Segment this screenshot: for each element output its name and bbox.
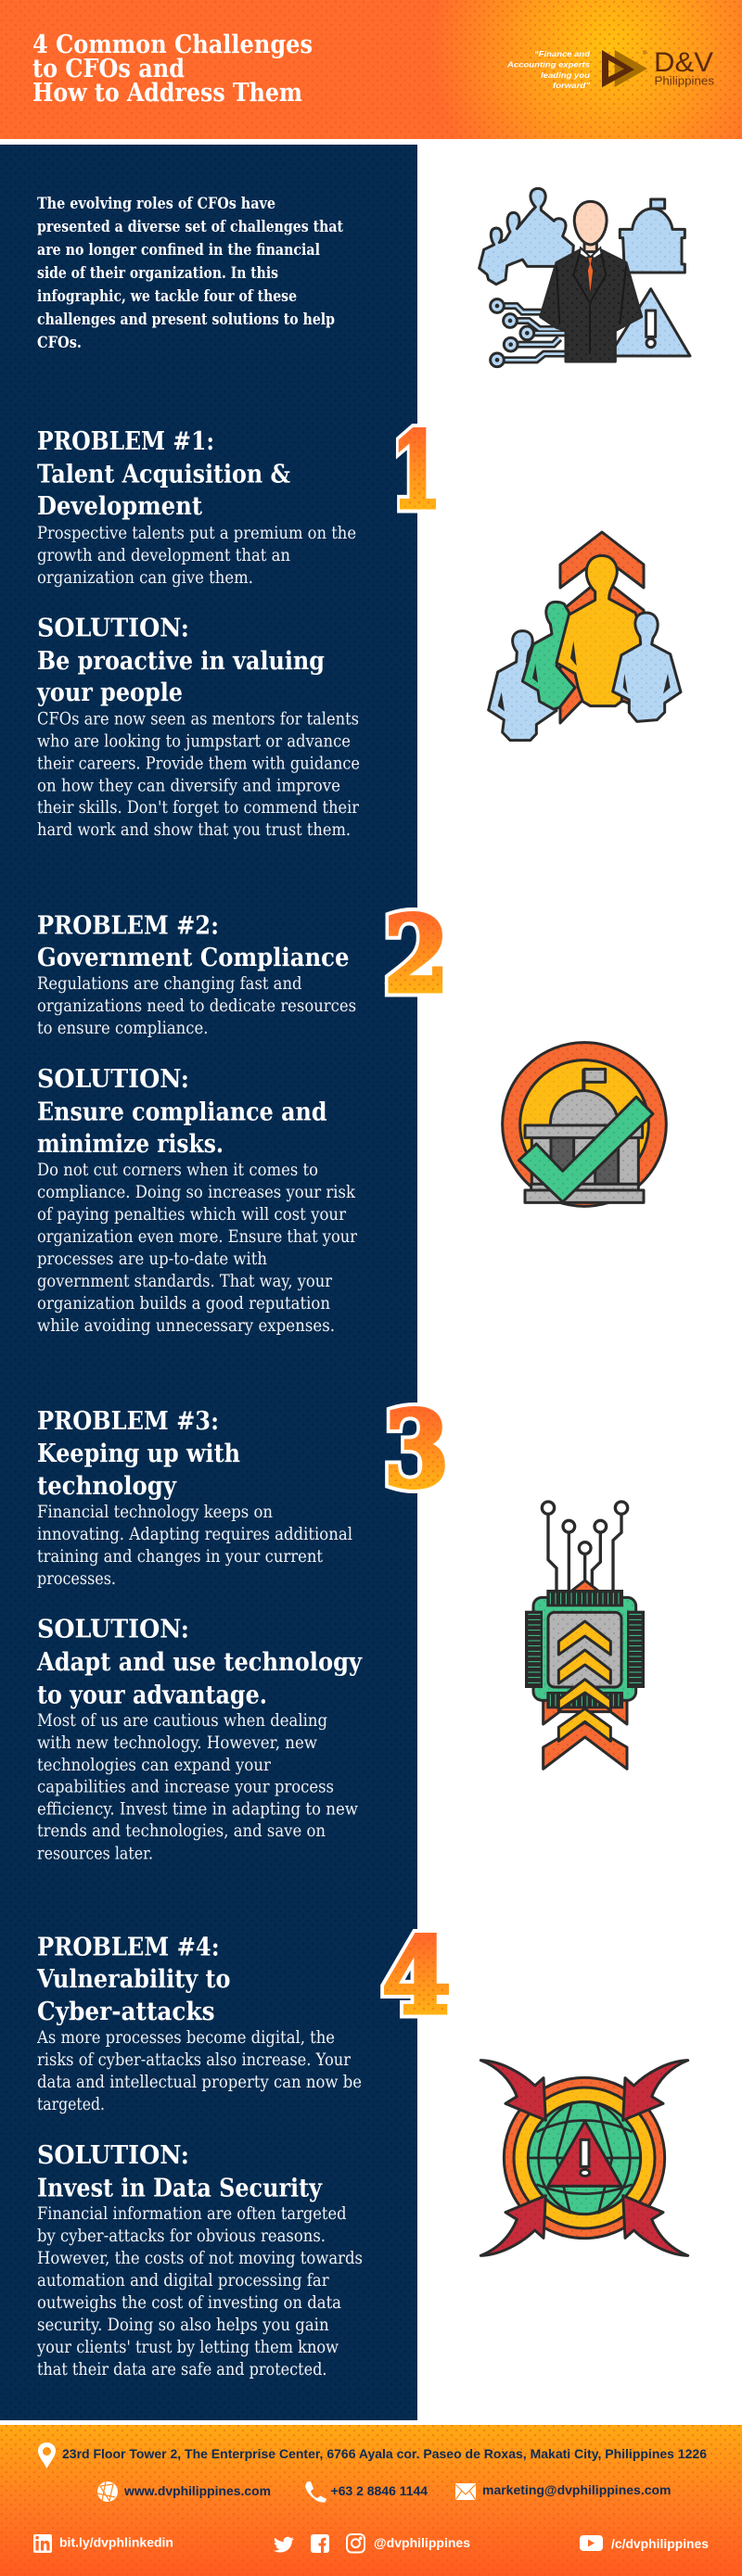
green person (522, 602, 575, 709)
linkedin handle: bit.ly/dvphlinkedin (59, 2535, 173, 2550)
problem 1 heading: Development (37, 492, 202, 521)
intro text: side of their organization. In this (37, 264, 278, 282)
problem 3 text (37, 1502, 352, 1589)
solution 1 heading: your people (36, 679, 183, 707)
numeral 2: 2 (384, 895, 449, 1016)
icon: youtube (580, 2535, 603, 2551)
solution 4 text (36, 2203, 363, 2379)
address: 23rd Floor Tower 2, The Enterprise Center, 6766 Ayala cor. Paseo de Roxas, Makati City, Philippines 1226 (62, 2446, 707, 2461)
yellow chevrons (558, 1621, 610, 1741)
solution 1 text: their careers. Provide them with guidance (37, 753, 360, 773)
tagline: leading you (541, 70, 591, 80)
numeral 4: 4 (382, 1916, 451, 2037)
intro text (37, 195, 343, 351)
solution 3 heading (36, 1615, 363, 1709)
intro text: presented a diverse set of challenges that (37, 218, 343, 235)
intro text: challenges and present solutions to help (37, 311, 335, 328)
problem 1 text: growth and development that an (37, 545, 290, 565)
circuit traces (491, 299, 569, 367)
title: to CFOs and (32, 55, 185, 83)
solution 3 text (37, 1710, 359, 1863)
solution 1 text: their skills. Don't forget to commend their (37, 797, 360, 818)
problem 3 heading: Keeping up with (37, 1440, 240, 1468)
icon: globe (97, 2481, 118, 2502)
numeral 1 (391, 411, 441, 532)
solution 4 text: outweighs the cost of investing on data (37, 2292, 341, 2313)
solution 4 text: by cyber-attacks for obvious reasons. (37, 2226, 326, 2246)
solution 2 text: Do not cut corners when it comes to (37, 1160, 318, 1180)
illustration: CFO with challenges (480, 188, 690, 367)
numeral 3: 3 (384, 1390, 449, 1511)
solution 2 text: processes are up-to-date with (37, 1249, 267, 1269)
numeral 1: 1 (391, 411, 441, 532)
website: www.dvphilippines.com (123, 2483, 271, 2498)
solution 1 text: on how they can diversify and improve (37, 775, 340, 795)
problem 2 text (37, 973, 356, 1038)
logo: D&V Philippines: D&V (654, 47, 713, 78)
orange chevrons (544, 1580, 627, 1769)
problem 2 text: Regulations are changing fast and (37, 973, 302, 994)
target rings (504, 2077, 665, 2239)
problem 4 text: targeted. (37, 2094, 105, 2114)
problem 2 text: to ensure compliance. (37, 1018, 208, 1038)
solution 3 text: trends and technologies, and save on (37, 1821, 326, 1841)
chip body (525, 1590, 645, 1708)
logo: D&V Philippines: Philippines (655, 74, 715, 88)
solution 4 text: that their data are safe and protected. (37, 2359, 326, 2379)
problem 1 text: organization can give them. (37, 567, 253, 588)
solution 4 text: your clients' trust by letting them know (36, 2337, 339, 2357)
man in suit (541, 201, 642, 362)
solution 4 heading: SOLUTION: (37, 2141, 189, 2170)
problem 2 heading: PROBLEM #2: (37, 912, 219, 941)
problem 3 heading: technology (37, 1472, 177, 1501)
problem 4 heading: Cyber-attacks (37, 1998, 215, 2026)
solution 4 heading (37, 2141, 323, 2202)
problem 2 heading (37, 912, 349, 972)
problem 1 text: Prospective talents put a premium on the (37, 523, 356, 543)
icon: location pin (38, 2443, 56, 2468)
icon: facebook (311, 2534, 329, 2553)
solution 3 text: technologies can expand your (37, 1755, 272, 1775)
email: marketing@dvphilippines.com (482, 2482, 672, 2497)
navy content panel (0, 145, 417, 2420)
tagline: Accounting experts (506, 60, 590, 70)
problem 4 text (36, 2027, 362, 2114)
problem 3 text: processes. (37, 1568, 116, 1589)
solution 2 heading: SOLUTION: (37, 1065, 189, 1094)
blue person right (613, 613, 681, 721)
solution 1 heading: SOLUTION: (37, 614, 189, 643)
problem 2 text: organizations need to dedicate resources (37, 996, 356, 1016)
solution 3 heading: Adapt and use technology (36, 1648, 363, 1677)
problem 2 heading: Government Compliance (37, 944, 349, 972)
yellow person (556, 555, 646, 706)
solution 1 heading: Be proactive in valuing (37, 647, 325, 676)
circuit leads (542, 1502, 628, 1590)
icon: linkedin (33, 2534, 52, 2553)
solution 2 text: while avoiding unnecessary expenses. (37, 1315, 335, 1336)
intro text: are no longer confined in the financial (37, 241, 320, 259)
numeral 1: 1 (391, 411, 441, 532)
title: 4 Common Challenges (32, 31, 313, 59)
solution 3 text: capabilities and increase your process (37, 1776, 334, 1796)
problem 1 heading: PROBLEM #1: (37, 427, 214, 456)
building (620, 199, 684, 273)
solution 2 heading: minimize risks. (37, 1130, 224, 1159)
tagline: forward” (553, 81, 591, 90)
solution 2 text: government standards. That way, your (37, 1271, 333, 1291)
problem 1 text (37, 523, 356, 588)
numeral 2: 2 (384, 895, 449, 1016)
youtube handle: /c/dvphilippines (611, 2536, 709, 2551)
solution 4 heading: Invest in Data Security (37, 2174, 323, 2202)
problem 3 text: innovating. Adapting requires additional (37, 1524, 352, 1544)
globe (528, 2101, 641, 2214)
warning triangle (609, 289, 690, 356)
problem 4 heading (36, 1933, 231, 2026)
tagline (506, 49, 591, 90)
illustration: government building with check mark (503, 1043, 666, 1206)
icon: twitter (274, 2537, 294, 2552)
solution 2 heading (37, 1065, 327, 1159)
numeral 4: 4 (382, 1916, 451, 2037)
numeral 4: 4 (382, 1916, 451, 2037)
numeral 2: 2 (384, 895, 449, 1016)
intro text: infographic, we tackle four of these (37, 287, 297, 305)
solution 2 text: of paying penalties which will cost your (37, 1204, 347, 1225)
solution 1 text: who are looking to jumpstart or advance (37, 730, 351, 751)
solution 3 text: with new technology. However, new (37, 1732, 318, 1753)
logo: D&V Philippines (602, 47, 715, 88)
solution 3 heading: SOLUTION: (37, 1615, 189, 1644)
problem 3 heading: PROBLEM #3: (37, 1407, 219, 1436)
solution 3 text: efficiency. Invest time in adapting to new (37, 1799, 359, 1820)
numeral 3: 3 (384, 1390, 449, 1511)
logo: D&V Philippines: ® (643, 50, 647, 57)
intro text: The evolving roles of CFOs have (37, 195, 275, 212)
title: How to Address Them (32, 79, 302, 108)
problem 4 text: As more processes become digital, the (36, 2027, 335, 2048)
problem 4 heading: PROBLEM #4: (37, 1933, 220, 1961)
title (32, 31, 313, 108)
blue person left (489, 631, 556, 741)
illustration: globe under attack (480, 2061, 688, 2255)
solution 3 heading: to your advantage. (37, 1681, 267, 1709)
problem 4 (36, 1933, 363, 2379)
problem 1 heading (37, 427, 290, 521)
illustration: microchip with chevrons (525, 1502, 645, 1769)
solution 1 heading (36, 614, 325, 707)
solution 1 text: CFOs are now seen as mentors for talents (37, 708, 359, 729)
emblem circles (503, 1043, 666, 1206)
problem 3 heading (37, 1407, 240, 1501)
problem 1 heading: Talent Acquisition & (37, 460, 290, 489)
solution 1 text: hard work and show that you trust them. (37, 819, 351, 840)
problem 4 heading: Vulnerability to (36, 1965, 231, 1994)
orange chevrons (560, 532, 644, 723)
solution 4 text: automation and digital processing far (37, 2270, 329, 2290)
intro text: CFOs. (37, 334, 82, 351)
building (525, 1069, 644, 1202)
problem 1 (36, 427, 360, 840)
problem 4 text: risks of cyber-attacks also increase. Your (37, 2049, 352, 2070)
solution 4 text: However, the costs of not moving towards (37, 2248, 363, 2268)
problem 2 (37, 912, 358, 1336)
solution 3 text: resources later. (37, 1843, 153, 1863)
numeral 3: 3 (384, 1390, 449, 1511)
solution 4 text: security. Doing so also helps you gain (37, 2315, 329, 2335)
social handle: @dvphilippines (374, 2535, 470, 2550)
tagline: “Finance and (534, 49, 591, 58)
check mark (518, 1097, 653, 1202)
header banner (0, 0, 742, 139)
problem 3 (36, 1407, 363, 1863)
solution 2 text: organization builds a good reputation (37, 1293, 330, 1313)
solution 4 text: Financial information are often targeted (37, 2203, 347, 2224)
solution 2 text: organization even more. Ensure that your (37, 1226, 358, 1247)
problem 3 text: Financial technology keeps on (37, 1502, 273, 1522)
problem 4 text: data and intellectual property can now be (37, 2072, 362, 2092)
numeral 1: 1 (391, 411, 441, 532)
solution 2 text (37, 1160, 358, 1336)
attack arrows (480, 2061, 688, 2255)
problem 3 text: training and changes in your current (37, 1546, 323, 1567)
solution 2 text: compliance. Doing so increases your risk (37, 1182, 355, 1202)
icon: phone (305, 2481, 326, 2503)
warning triangle (548, 2121, 621, 2186)
phone number: +63 2 8846 1144 (331, 2483, 428, 2498)
solution 3 text: Most of us are cautious when dealing (37, 1710, 327, 1731)
icon: instagram (347, 2534, 365, 2553)
illustration: people and arrows (489, 532, 681, 741)
footer banner (0, 2425, 742, 2576)
icon: mail (455, 2483, 476, 2500)
solution 2 heading: Ensure compliance and (37, 1098, 327, 1127)
crowd silhouette (480, 188, 573, 285)
solution 1 text (37, 708, 360, 840)
